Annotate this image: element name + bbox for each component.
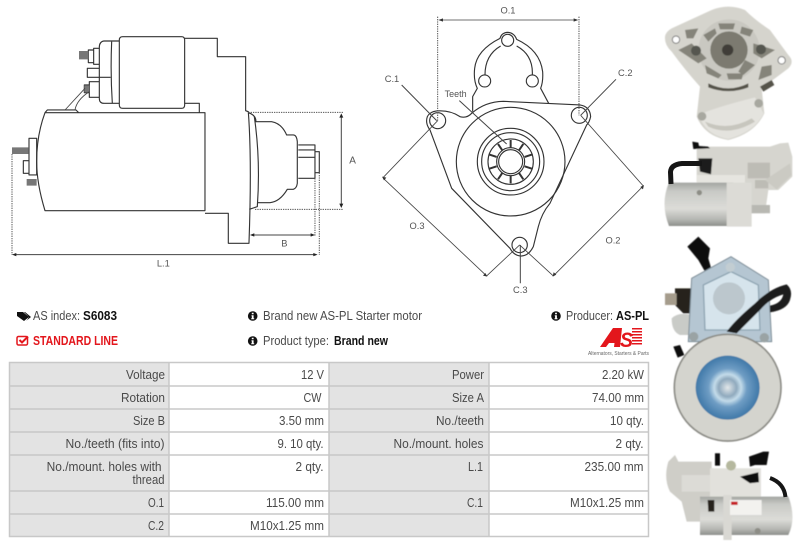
row 4: 2 qty. [616, 437, 644, 451]
row 2: Size A [452, 391, 485, 405]
photo: starter front view [665, 7, 792, 140]
row 4: 9. 10 qty. [278, 437, 324, 451]
row 4: No./mount. holes [394, 437, 484, 451]
row 1: Voltage [126, 368, 165, 382]
solenoid terminals [84, 48, 111, 97]
row 3 [133, 414, 644, 428]
dimension lines [12, 112, 343, 255]
label columns [9, 362, 489, 537]
producer: Producer: [566, 308, 613, 323]
standard line: STANDARD LINE [33, 333, 118, 348]
photo: starter rear view [665, 237, 791, 441]
callout leaders [402, 79, 616, 283]
rear terminals [23, 138, 37, 175]
cable [727, 284, 791, 333]
grid [9, 362, 649, 537]
mounting flange outline [427, 101, 591, 256]
specification table [9, 362, 649, 537]
wire [65, 88, 89, 110]
row 5: 2 qty. [296, 460, 324, 474]
photo: starter opposite side view [666, 452, 792, 540]
front view technical drawing [382, 6, 644, 295]
row 1 [126, 368, 644, 382]
row 5: 235.00 mm [584, 460, 644, 474]
row 2: Rotation [121, 391, 165, 405]
logo: AS: Alternators, Starters & Parts [588, 351, 649, 357]
photo: starter side view with cable [664, 142, 792, 227]
row 6: M10x1.25 mm [570, 496, 644, 510]
pinion teeth [489, 140, 533, 183]
info row: AS-PL [616, 308, 649, 323]
cable: side view [670, 164, 702, 184]
row 2 [121, 391, 644, 405]
row 7: C.2 [148, 519, 164, 533]
dimension labels [385, 6, 633, 295]
dimension labels: Teeth [445, 89, 467, 99]
row 7: M10x1.25 mm [250, 519, 324, 533]
dimension labels [157, 155, 356, 269]
row 2: CW [304, 391, 322, 405]
side view technical drawing [12, 37, 356, 269]
dimension labels: B [281, 239, 287, 249]
dimension labels: O.2 [605, 235, 620, 245]
dimension labels: O.1 [500, 6, 516, 16]
info row: Brand new [334, 333, 389, 348]
row 1: 12 V [301, 368, 325, 382]
icon: info [248, 336, 258, 346]
logo: AS [588, 328, 649, 357]
row 1: Power [452, 368, 484, 382]
nose and pinion [248, 113, 319, 209]
row 3: No./teeth [436, 414, 484, 428]
dimension labels: C.3 [513, 285, 528, 295]
row 6: C.1 [467, 496, 483, 510]
solenoid mount [473, 32, 549, 112]
drive housing [185, 38, 250, 243]
row 5: L.1 [468, 460, 483, 474]
dimension labels: C.1 [385, 74, 399, 84]
row 3: 3.50 mm [279, 414, 324, 428]
dimension lines [438, 17, 579, 121]
row 4 [66, 437, 644, 451]
row 4: No./teeth (fits into) [66, 437, 164, 451]
row 6 [148, 496, 644, 510]
cable: opposite side view [770, 478, 786, 497]
dimension labels: L.1 [157, 259, 170, 269]
row 1: 2.20 kW [602, 368, 644, 382]
logo: AS: S [620, 329, 633, 352]
solenoid [99, 37, 185, 108]
icon: tags [17, 312, 31, 321]
row 6: 115.00 mm [266, 496, 324, 510]
dimension labels: O.3 [409, 221, 425, 231]
row 5: No./mount. holes with [47, 460, 162, 474]
dimension labels: C.2 [618, 68, 633, 78]
motor body [37, 110, 205, 211]
mounting holes [430, 34, 587, 253]
row 2: 74.00 mm [592, 391, 644, 405]
info row [17, 308, 649, 348]
nose rings and pinion [456, 107, 565, 216]
product type: Product type: [263, 333, 329, 348]
row 6: O.1 [148, 496, 164, 510]
info row: S6083 [83, 308, 117, 323]
icon: checked box [17, 336, 28, 345]
icon: info [551, 311, 561, 321]
description: Brand new AS-PL Starter motor [263, 308, 423, 323]
row 7 [148, 519, 324, 533]
row 3: Size B [133, 414, 165, 428]
row 5 [47, 460, 644, 487]
dimension labels: A [349, 155, 356, 166]
AS index: AS index: [33, 308, 80, 323]
icon: info [248, 311, 258, 321]
row 3: 10 qty. [610, 414, 644, 428]
row 5: thread [132, 473, 165, 487]
